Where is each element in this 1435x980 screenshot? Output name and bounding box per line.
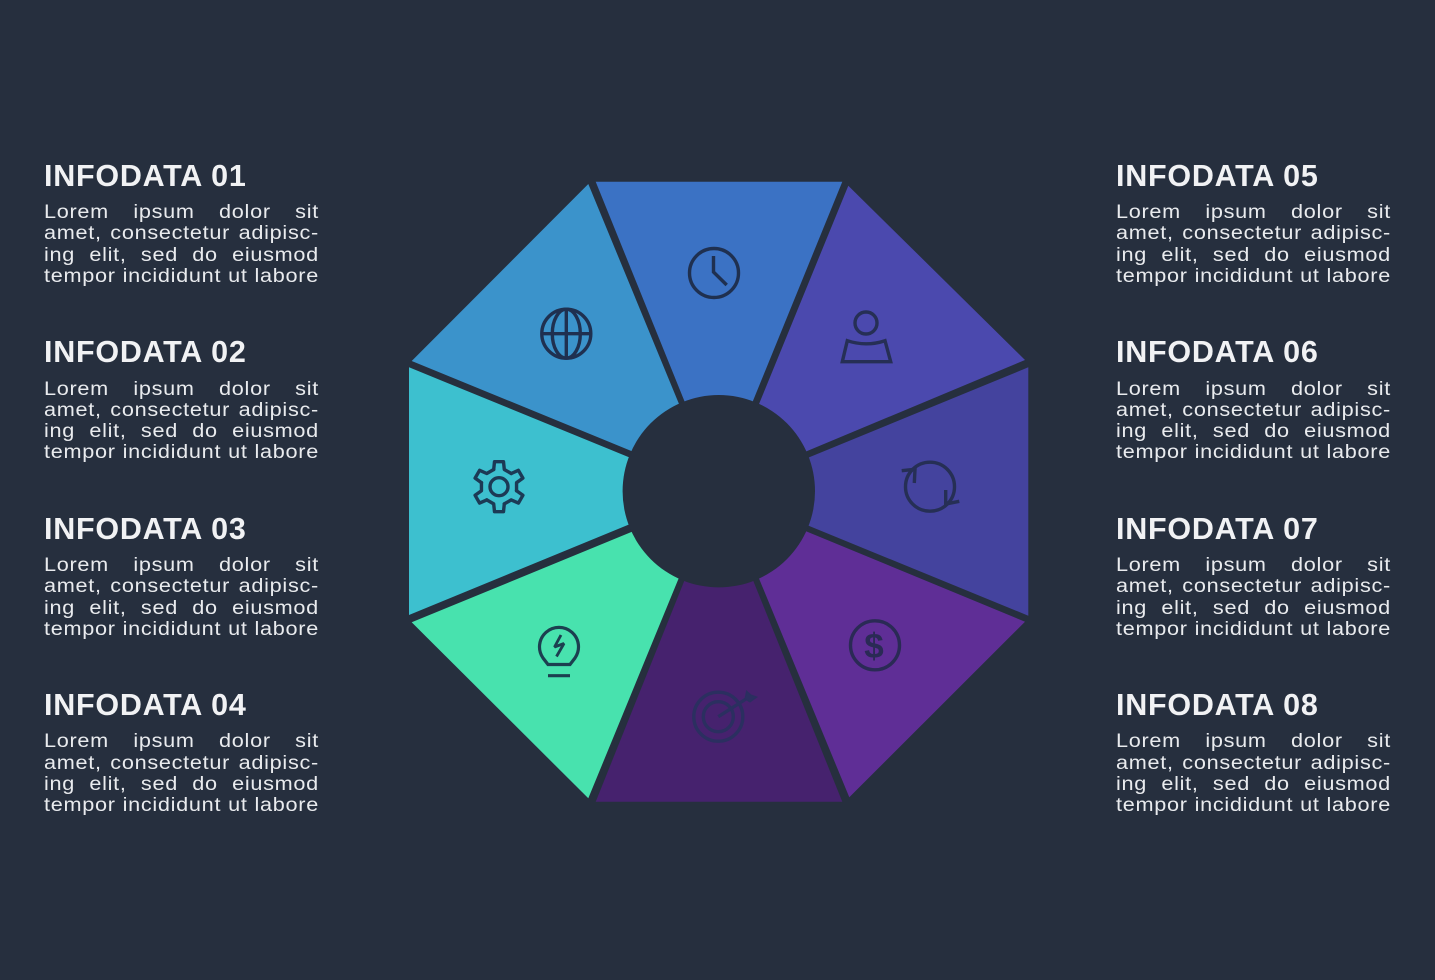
text block: infodata 02	[44, 335, 319, 463]
text block: infodata 02: amet, consectetur adipisc-	[44, 400, 319, 421]
text block: infodata 06: ing elit, sed do eiusmod	[1116, 421, 1391, 442]
text block: infodata 01: amet, consectetur adipisc-	[44, 223, 319, 244]
icon: gear	[471, 462, 527, 512]
text block: infodata 08: ing elit, sed do eiusmod	[1116, 774, 1391, 795]
text block: infodata 08: tempor incididunt ut labore	[1116, 795, 1391, 816]
icon: target	[694, 691, 757, 741]
icon: light bulb	[540, 627, 578, 676]
text block: infodata 07: Lorem ipsum dolor sit	[1116, 555, 1391, 576]
icon: refresh arrows	[902, 462, 959, 511]
segment: lower left green	[412, 531, 680, 798]
icon: person	[842, 312, 891, 362]
text block: infodata 03: amet, consectetur adipisc-	[44, 576, 319, 597]
text block: infodata 05: tempor incididunt ut labore	[1116, 266, 1391, 287]
text block: infodata 01	[44, 159, 319, 287]
text block: infodata 08: amet, consectetur adipisc-	[1116, 753, 1391, 774]
text block: infodata 02: INFODATA 02	[44, 335, 247, 369]
text block: infodata 02: tempor incididunt ut labore	[44, 442, 319, 463]
text block: infodata 04	[44, 688, 319, 816]
text block: infodata 05: Lorem ipsum dolor sit	[1116, 202, 1391, 223]
segment: upper left blue	[412, 184, 680, 452]
text block: infodata 02: ing elit, sed do eiusmod	[44, 421, 319, 442]
text block: infodata 08: INFODATA 08	[1116, 688, 1319, 722]
text block: infodata 07	[1116, 512, 1391, 640]
text block: infodata 05: INFODATA 05	[1116, 159, 1319, 193]
text block: infodata 04: tempor incididunt ut labore	[44, 795, 319, 816]
segment: top blue	[596, 182, 842, 430]
text block: infodata 06: tempor incididunt ut labore	[1116, 442, 1391, 463]
text block: infodata 07: INFODATA 07	[1116, 512, 1319, 546]
text block: infodata 01: tempor incididunt ut labore	[44, 266, 319, 287]
text block: infodata 04: amet, consectetur adipisc-	[44, 753, 319, 774]
text block: infodata 07: amet, consectetur adipisc-	[1116, 576, 1391, 597]
text block: infodata 01: ing elit, sed do eiusmod	[44, 245, 319, 266]
text block: infodata 07: ing elit, sed do eiusmod	[1116, 598, 1391, 619]
text block: infodata 05: amet, consectetur adipisc-	[1116, 223, 1391, 244]
text block: infodata 01: INFODATA 01	[44, 159, 247, 193]
segment: left teal	[409, 367, 631, 615]
center circle	[623, 395, 815, 587]
text block: infodata 03: Lorem ipsum dolor sit	[44, 555, 319, 576]
text block: infodata 08: Lorem ipsum dolor sit	[1116, 731, 1391, 752]
text block: infodata 05	[1116, 159, 1391, 287]
segment: lower right purple	[758, 530, 1025, 797]
text block: infodata 05: ing elit, sed do eiusmod	[1116, 245, 1391, 266]
text block: infodata 02: Lorem ipsum dolor sit	[44, 379, 319, 400]
text block: infodata 06	[1116, 335, 1391, 463]
icon: dollar coin	[850, 621, 900, 670]
text block: infodata 03	[44, 512, 319, 640]
icon: dollar coin: $	[864, 627, 884, 666]
text block: infodata 04: Lorem ipsum dolor sit	[44, 731, 319, 752]
segment: right indigo	[806, 367, 1028, 616]
text block: infodata 03: tempor incididunt ut labore	[44, 619, 319, 640]
icon: globe	[542, 309, 591, 358]
text block: infodata 06: INFODATA 06	[1116, 335, 1319, 369]
segment: upper right indigo	[758, 186, 1025, 452]
text block: infodata 07: tempor incididunt ut labore	[1116, 619, 1391, 640]
text block: infodata 04: INFODATA 04	[44, 688, 247, 722]
text block: infodata 03: INFODATA 03	[44, 512, 247, 546]
text block: infodata 03: ing elit, sed do eiusmod	[44, 598, 319, 619]
segment: bottom dark purple	[596, 579, 842, 802]
icon: clock	[690, 248, 738, 298]
text block: infodata 04: ing elit, sed do eiusmod	[44, 774, 319, 795]
text block: infodata 06: Lorem ipsum dolor sit	[1116, 379, 1391, 400]
text block: infodata 08	[1116, 688, 1391, 816]
text block: infodata 06: amet, consectetur adipisc-	[1116, 400, 1391, 421]
text block: infodata 01: Lorem ipsum dolor sit	[44, 202, 319, 223]
